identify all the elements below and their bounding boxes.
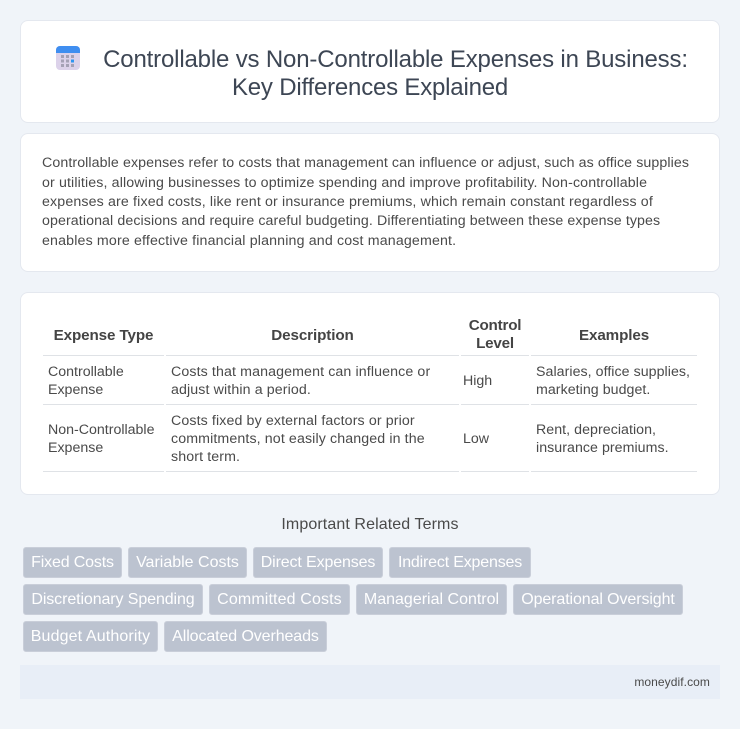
- table header: Examples: [579, 327, 649, 344]
- row: non-controllable expense: short term.: [171, 449, 240, 465]
- row: controllable expense: Controllable: [48, 364, 124, 380]
- row: controllable expense: adjust within a period.: [171, 382, 311, 398]
- title: Key Differences Explained: [232, 74, 508, 101]
- intro paragraph: expenses are fixed costs, like rent or insurance premiums, which remain constant regardless of: [42, 194, 653, 210]
- related terms tags: Operational Oversight: [521, 591, 675, 608]
- related terms tags: Direct Expenses: [261, 554, 375, 571]
- comparison table: [43, 317, 697, 472]
- related terms tags: [23, 547, 683, 652]
- icon: calendar: [56, 46, 80, 70]
- row: controllable expense: [48, 364, 690, 398]
- related terms tags: Indirect Expenses: [398, 554, 522, 571]
- row: non-controllable expense: Rent, depreciation,: [536, 422, 656, 438]
- row: non-controllable expense: Low: [463, 431, 489, 447]
- intro paragraph: enables more effective financial planning and cost management.: [42, 232, 456, 248]
- footer source: moneydif.com: [634, 675, 710, 689]
- panel: title card: [20, 20, 720, 123]
- title: Controllable vs Non-Controllable Expenses in Business:: [103, 46, 688, 73]
- row: controllable expense: marketing budget.: [536, 382, 650, 398]
- related terms tags: Allocated Overheads: [172, 628, 319, 645]
- intro paragraph: or utilities, allowing businesses to optimize spending and improve profitability. Non-controllable: [42, 174, 647, 190]
- related terms heading: Important Related Terms: [281, 516, 459, 533]
- row: non-controllable expense: commitments, not easily changed in the: [171, 431, 425, 447]
- row: non-controllable expense: insurance premiums.: [536, 440, 669, 456]
- row: controllable expense: High: [463, 373, 492, 389]
- row: non-controllable expense: Non-Controllable: [48, 422, 154, 438]
- related terms tags: Committed Costs: [217, 591, 342, 608]
- intro paragraph: Controllable expenses refer to costs that management can influence or adjust, such as office supplies: [42, 155, 689, 171]
- row: non-controllable expense: Costs fixed by external factors or prior: [171, 413, 415, 429]
- intro paragraph: [42, 155, 689, 248]
- row: controllable expense: Salaries, office supplies,: [536, 364, 690, 380]
- related terms tags: Managerial Control: [364, 591, 499, 608]
- intro paragraph: operational decisions and require careful budgeting. Differentiating between these expense types: [42, 213, 660, 229]
- table header: Control: [469, 317, 521, 334]
- related terms tags: Variable Costs: [136, 554, 239, 571]
- row: controllable expense: Expense: [48, 382, 103, 398]
- related terms tags: Fixed Costs: [31, 554, 114, 571]
- panel: intro text card: [20, 133, 720, 272]
- table header: [54, 317, 649, 352]
- table header: Expense Type: [54, 327, 153, 344]
- title: [103, 46, 688, 101]
- table header: Level: [476, 335, 514, 352]
- row: non-controllable expense: Expense: [48, 440, 103, 456]
- related terms tags: Budget Authority: [31, 628, 150, 645]
- row: non-controllable expense: [48, 413, 669, 465]
- related terms tags: Discretionary Spending: [31, 591, 195, 608]
- footer bar: [20, 665, 720, 699]
- row: controllable expense: Costs that management can influence or: [171, 364, 430, 380]
- panel: comparison table card: [20, 292, 720, 495]
- table header: Description: [271, 327, 354, 344]
